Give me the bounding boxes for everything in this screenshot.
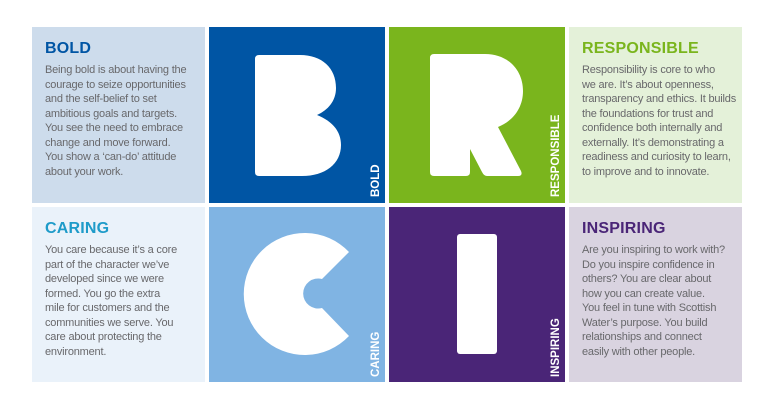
text: bold description: Being bold is about having the: [45, 64, 186, 76]
panel: bold text: [32, 27, 205, 203]
label: CARING: CARING: [370, 332, 382, 377]
text: responsible description: transparency and ethics. It builds: [582, 93, 736, 105]
text: inspiring description: Water’s purpose. You build: [582, 316, 707, 328]
text: bold description: [45, 64, 186, 178]
panel: R: [389, 27, 565, 203]
heading: bold: BOLD: [45, 40, 91, 57]
text: bold description: and the self-belief to set: [45, 93, 157, 105]
text: caring description: communities we serve. You: [45, 316, 173, 328]
icon: letter B: [255, 55, 341, 176]
text: caring description: formed. You go the extra: [45, 288, 160, 300]
text: responsible description: the foundations for trust and: [582, 108, 713, 120]
label: INSPIRING: INSPIRING: [550, 318, 562, 377]
text: responsible description: we are. It’s about openness,: [582, 78, 714, 90]
panel: B: [209, 27, 385, 203]
text: bold description: You show a ‘can-do’ attitude: [45, 151, 176, 163]
text: caring description: part of the character we’ve: [45, 258, 169, 270]
panel: caring text: [32, 207, 205, 382]
text: inspiring description: Are you inspiring to work with?: [582, 244, 725, 256]
text: bold description: about your work.: [45, 166, 123, 178]
icon: letter R: [430, 54, 523, 176]
text: bold description: ambitious goals and targets.: [45, 108, 177, 120]
label: RESPONSIBLE: RESPONSIBLE: [550, 114, 562, 197]
text: inspiring description: You feel in tune with Scottish: [582, 302, 716, 314]
text: caring description: [45, 244, 177, 358]
text: caring description: environment.: [45, 346, 106, 358]
text: caring description: You care because it’s a core: [45, 244, 177, 256]
panel: I: [389, 207, 565, 382]
text: inspiring description: how you can create value.: [582, 288, 705, 300]
text: responsible description: to improve and to innovate.: [582, 166, 709, 178]
text: bold description: change and move forward.: [45, 136, 170, 148]
icon: letter C: [244, 233, 349, 355]
text: inspiring description: easily with other people.: [582, 346, 695, 358]
icon: letter I: [457, 234, 497, 354]
text: inspiring description: relationships and connect: [582, 331, 702, 343]
text: responsible description: externally. It’s demonstrating a: [582, 136, 724, 148]
text: responsible description: Responsibility is core to who: [582, 64, 715, 76]
text: inspiring description: others? You are clear about: [582, 273, 711, 285]
text: responsible description: [582, 64, 736, 178]
text: responsible description: confidence both internally and: [582, 122, 722, 134]
panel: responsible text: [569, 27, 742, 203]
text: inspiring description: Do you inspire confidence in: [582, 258, 715, 270]
text: bold description: courage to seize opportunities: [45, 78, 186, 90]
label: BOLD: BOLD: [370, 164, 382, 197]
text: bold description: You see the need to embrace: [45, 122, 183, 134]
panel: C: [209, 207, 385, 382]
heading: inspiring: INSPIRING: [582, 220, 666, 237]
text: responsible description: readiness and curiosity to learn,: [582, 151, 731, 163]
text: caring description: care about protecting the: [45, 331, 162, 343]
heading: responsible: RESPONSIBLE: [582, 40, 699, 57]
text: caring description: developed since we were: [45, 273, 164, 285]
text: caring description: mile for customers and the: [45, 302, 169, 314]
heading: caring: CARING: [45, 220, 109, 237]
panel: inspiring text: [569, 207, 742, 382]
text: inspiring description: [582, 244, 725, 358]
